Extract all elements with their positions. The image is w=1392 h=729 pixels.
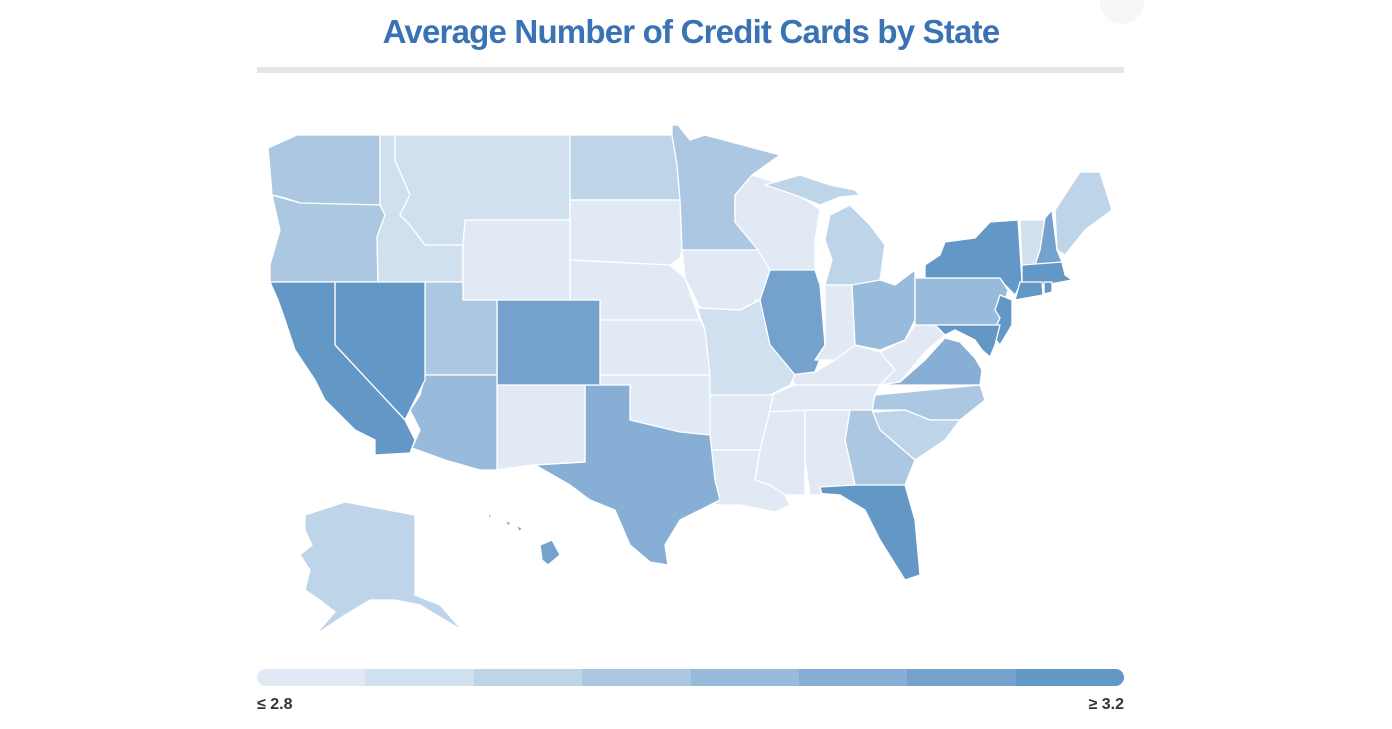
legend max label: ≥ 3.2 [1089,696,1124,713]
legend [257,669,1124,686]
title: Average Number of Credit Cards by State [383,13,999,50]
legend min label: ≤ 2.8 [257,696,292,713]
